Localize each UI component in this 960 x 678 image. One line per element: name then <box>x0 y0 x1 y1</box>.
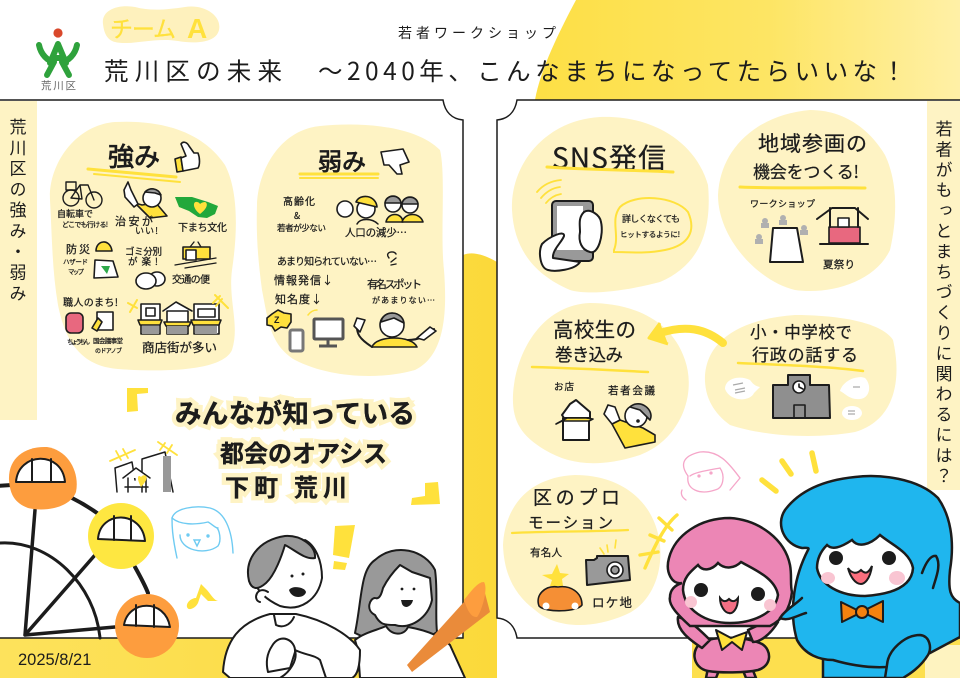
text: disaster prevention <box>63 241 90 276</box>
heading: SNS: SNS発信 <box>552 137 666 177</box>
text: aging <box>277 193 326 234</box>
text: transit: 交通の便 <box>172 271 210 286</box>
icon: phone <box>290 330 303 351</box>
text: few famous spots <box>367 276 435 306</box>
icon: three people <box>337 196 423 224</box>
heading: high school students <box>553 313 636 367</box>
logo: Arakawa ward: 荒川区 <box>41 78 76 93</box>
icon: orange bow tie <box>841 601 883 622</box>
panel: weaknesses <box>257 125 445 376</box>
icon: music note <box>187 584 218 609</box>
sparkles: yellow hatch <box>640 515 677 568</box>
heading: community participation: 地域参画の <box>758 128 867 158</box>
slogan: 下町 荒川 <box>225 468 347 503</box>
icon: sleeping badge <box>267 310 291 331</box>
heading: community participation <box>753 128 867 183</box>
icon: thumbs up <box>175 142 200 172</box>
text: cycling: 自転車で <box>57 207 93 220</box>
text: lantern and door knob captions <box>67 335 124 355</box>
icon: green map with heart <box>175 197 218 218</box>
icon: bicycle <box>63 182 102 208</box>
sidebar: strengths and weaknesses label: 荒川区の強み・弱み <box>6 118 30 305</box>
title: ～2040年、こんなまちになってたらいいな！ <box>318 53 906 88</box>
text: summer festival: 夏祭り <box>823 257 855 272</box>
icon: yellow bow <box>716 630 747 650</box>
text: celebrity: 有名人 <box>530 545 562 560</box>
text: safety: 治安が <box>115 213 153 229</box>
bubble: community participation <box>718 110 895 291</box>
text: few famous spots: 有名スポット <box>367 276 422 292</box>
bubble: ward promotion <box>503 475 660 625</box>
icon: person thumbs up <box>124 182 167 218</box>
text: garbage sorting <box>125 244 162 268</box>
text: garbage sorting: が楽! <box>128 254 158 268</box>
heading: community participation: 機会をつくる! <box>753 158 859 183</box>
heading: ward promotion <box>528 483 620 533</box>
text: filming location: ロケ地 <box>592 592 632 611</box>
gondola: orange bottom <box>115 594 179 658</box>
icon: waving student <box>604 404 655 448</box>
icon: door knob sheet <box>92 312 113 331</box>
logo: Arakawa ward <box>39 28 77 93</box>
character: blue mascot <box>780 476 960 678</box>
sidebar: how to involve young people: 若者がもっとまちづくりに関わるには？ <box>932 120 956 487</box>
slogan: 都会のオアシス <box>220 434 387 469</box>
panel: strengths <box>50 122 236 370</box>
text: not well known: あまり知られていない… <box>277 253 377 268</box>
ticks: yellow emphasis <box>762 453 816 491</box>
text: cycling: どこでも行ける! <box>62 220 108 230</box>
icon: thumbs down <box>381 149 409 174</box>
title: 荒川区の未来 <box>104 53 282 88</box>
illustration: ferris wheel <box>0 447 179 658</box>
text: low outreach: 情報発信↓ <box>274 272 333 288</box>
icon: train <box>175 242 216 268</box>
text: shops: お店 <box>554 379 574 393</box>
icon: school building <box>773 375 830 418</box>
icon: workshop table <box>755 215 808 262</box>
text: disaster prevention: ハザード <box>63 256 88 266</box>
panel: left white panel <box>0 100 463 638</box>
heading: schools <box>750 319 858 366</box>
team badge <box>103 6 219 44</box>
text: disaster prevention: 防災 <box>66 241 90 257</box>
heading: ward promotion: 区のプロ <box>533 483 620 510</box>
text: lantern and door knob captions: 国会議事堂 <box>93 335 124 345</box>
illustration: woman <box>355 550 465 678</box>
text: garbage sorting: ゴミ分別 <box>125 244 162 258</box>
slogan <box>175 392 415 503</box>
heading: high school students: 高校生の <box>553 313 636 343</box>
text: safety <box>115 213 158 237</box>
team badge: A <box>187 13 207 44</box>
text: few famous spots: があまりない… <box>372 295 435 306</box>
brackets: yellow corners <box>127 388 440 505</box>
bubble: left speech <box>725 378 760 399</box>
text: many shopping streets: 商店街が多い <box>142 337 217 356</box>
icon: sleeping badge: Z <box>274 315 280 325</box>
bubble: schools <box>705 315 896 436</box>
team badge: チーム <box>110 10 176 44</box>
slogan: みんなが知っている <box>175 392 415 431</box>
text: lantern and door knob captions: のドアノブ <box>95 346 122 355</box>
icon: signal waves <box>537 180 561 203</box>
gondola: yellow <box>88 503 154 569</box>
text: craftsmen town: 職人のまち! <box>63 294 118 309</box>
icon: star and mascot <box>538 564 582 611</box>
heading: high school students: 巻き込み <box>555 342 623 367</box>
text: low outreach: 知名度↓ <box>275 291 322 307</box>
heading: ward promotion: モーション <box>528 511 613 533</box>
icon: garbage bags <box>136 272 165 289</box>
bubble: high school students <box>513 303 689 463</box>
heading: schools: 小・中学校で <box>750 319 852 343</box>
gondola: orange top <box>9 447 77 509</box>
icon: lantern <box>66 313 83 333</box>
text: cycling <box>57 207 108 230</box>
slogan: 都会のオアシス <box>220 434 387 469</box>
callout: SNS speech <box>614 198 691 252</box>
heading: strengths: 強み <box>108 137 160 174</box>
icon: phone in hand <box>540 201 602 271</box>
text: youth council: 若者会議 <box>608 383 656 398</box>
heading: schools: 行政の話する <box>752 341 858 366</box>
subtitle: 若者ワークショップ <box>398 23 556 43</box>
callout: SNS speech: 詳しくなくても <box>622 212 680 225</box>
icon: orange megaphone <box>407 582 490 672</box>
icon: hard hat <box>96 242 112 251</box>
text: aging: & <box>294 209 300 222</box>
illustration: man <box>223 536 360 678</box>
slogan: 下町 荒川 <box>225 468 347 503</box>
icon: festival stall <box>817 208 868 244</box>
text: downtown culture: 下まち文化 <box>178 219 227 234</box>
slogan: みんなが知っている <box>175 392 415 431</box>
icon: shopping street <box>128 295 228 334</box>
text: lantern and door knob captions: ちょうちん <box>67 336 90 346</box>
text: safety: いい! <box>135 224 158 237</box>
bubble: SNS <box>512 117 709 292</box>
panel: right white panel <box>497 100 960 638</box>
text: disaster prevention: マップ <box>68 266 84 276</box>
text: low outreach <box>274 272 333 307</box>
icon: exclamation mark <box>333 525 355 570</box>
heading: weaknesses: 弱み <box>318 142 366 177</box>
character: pink mascot <box>668 518 792 678</box>
illustration: city sketch <box>110 442 177 492</box>
icon: shop house <box>556 400 593 440</box>
illustration: pink doodle <box>681 452 740 500</box>
date: 2025/8/21 <box>18 651 91 669</box>
arrow: schools to high school <box>649 323 723 344</box>
sidebar: strengths and weaknesses label <box>0 101 37 420</box>
text: aging: 若者が少ない <box>277 222 326 234</box>
icon: monitor <box>308 310 343 346</box>
text: population decline: 人口の減少… <box>345 225 407 240</box>
callout: SNS speech: ヒットするように! <box>620 229 680 240</box>
text: workshop: ワークショップ <box>750 197 815 210</box>
icon: hazard map <box>94 260 118 278</box>
bubble: right speech <box>840 377 869 420</box>
icon: camera <box>586 540 630 585</box>
icon: shrugging person <box>354 313 436 347</box>
text: aging: 高齢化 <box>283 193 315 208</box>
illustration: blue doodle <box>172 507 233 558</box>
